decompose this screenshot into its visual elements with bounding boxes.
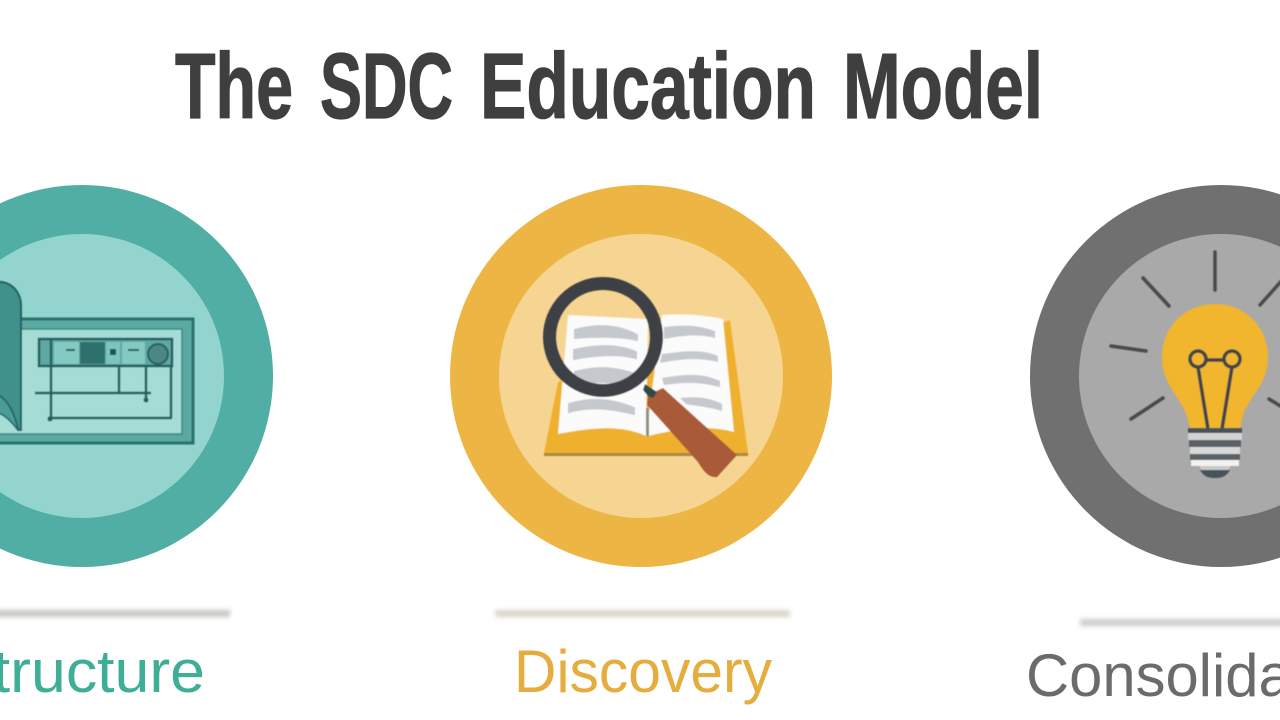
structure badge	[0, 185, 273, 567]
panel: structure	[0, 185, 273, 705]
shadow line	[1080, 619, 1280, 626]
title: The	[175, 34, 293, 138]
title: Education	[480, 34, 816, 138]
icon: blueprint book	[0, 282, 193, 443]
title: Model	[843, 34, 1043, 138]
icon: light bulb	[1111, 252, 1280, 478]
panel: consolidation	[1026, 185, 1280, 709]
panel: discovery	[450, 185, 832, 705]
shadow line	[0, 610, 230, 617]
consolidation badge	[1030, 185, 1280, 567]
label: discovery: Discovery	[514, 638, 772, 705]
discovery badge	[450, 185, 832, 567]
shadow line	[495, 610, 790, 617]
icon: book and magnifier	[544, 284, 748, 477]
title: SDC	[320, 34, 453, 138]
